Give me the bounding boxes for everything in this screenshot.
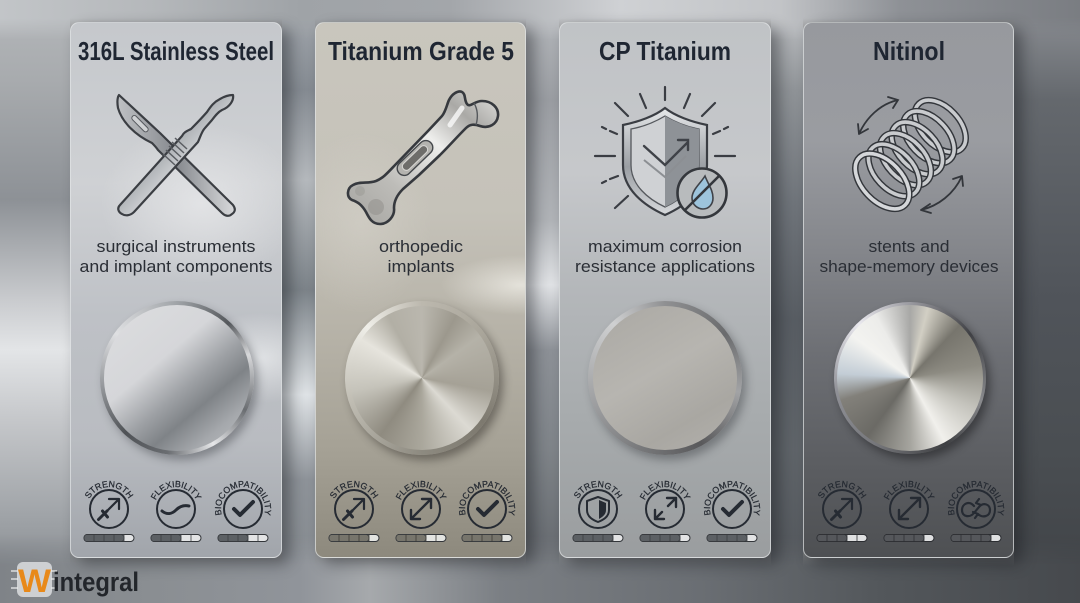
rating: strength [572,480,624,542]
description: orthopedic [379,237,464,256]
rating: strength: STRENGTH [574,480,622,498]
description: maximum corrosion [588,237,742,256]
heading: Nitinol [873,36,945,66]
rating: flexibility: FLEXIBILITY [396,480,447,500]
rating: flexibility [640,480,691,542]
description: shape-memory devices [820,257,998,276]
rating: flexibility: FLEXIBILITY [150,480,202,500]
panel: Nitinol [803,22,1014,558]
rating: biocompatibility [704,480,760,542]
rating: flexibility [150,480,202,542]
rating: biocompatibility: BIOCOMPATIBILITY [948,480,1004,516]
description: surgical instruments [96,237,256,256]
heading: 316L Stainless Steel [78,36,274,66]
rating: biocompatibility [458,480,516,542]
description [575,237,755,276]
logo: Wintegral [11,562,139,599]
icon: crossed scalpels [117,95,235,216]
rating: strength [816,480,868,542]
icon: shield with corrosion block [595,87,735,218]
logo: Wintegral: integral [53,567,139,597]
rating: biocompatibility [214,480,272,542]
rating: biocompatibility: BIOCOMPATIBILITY [458,480,516,516]
description: implants [388,257,454,276]
metal disc: 316L [100,301,254,455]
rating: strength: STRENGTH [85,480,134,498]
description [80,237,272,276]
rating: flexibility [884,480,935,542]
rating: strength [328,480,380,542]
heading: CP Titanium [599,36,731,66]
rating: strength: STRENGTH [818,480,866,498]
panel: Titanium Grade 5 [315,22,526,558]
rating: biocompatibility: BIOCOMPATIBILITY [214,480,272,516]
panel: CP Titanium [559,22,771,558]
rating: flexibility: FLEXIBILITY [884,480,935,500]
description: resistance applications [575,257,755,276]
rating: strength [84,480,134,542]
metal disc: Nitinol [834,302,986,454]
rating: flexibility: FLEXIBILITY [640,480,691,500]
rating: biocompatibility: BIOCOMPATIBILITY [704,480,760,516]
icon: nitinol spring [845,89,977,219]
heading: Titanium Grade 5 [328,36,514,66]
icon: femur bone with implant [348,91,498,224]
metal disc: CP Titanium [588,301,742,455]
rating: biocompatibility [948,480,1004,542]
description: and implant components [80,257,272,276]
logo: Wintegral: W [18,563,52,599]
description [820,237,998,276]
rating: flexibility [396,480,447,542]
description [379,237,464,276]
panel: 316L Stainless Steel [70,22,282,558]
rating: strength: STRENGTH [330,480,378,498]
metal disc: Titanium Grade 5 [345,301,499,455]
description: stents and [868,237,950,256]
